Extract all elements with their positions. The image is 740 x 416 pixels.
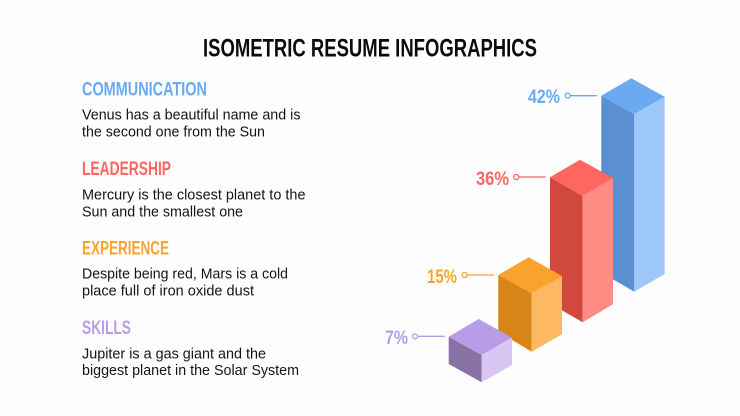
callout: 7% [385,327,445,349]
callout: 36% [476,168,546,190]
description: skills: Jupiter is a gas giant and the [82,345,266,362]
description: communication: the second one from the Sun [82,123,265,140]
heading: communication: COMMUNICATION [82,78,207,100]
description: skills: biggest planet in the Solar System [82,362,299,379]
callout: 42% [528,86,597,108]
callout: 7%: 7% [385,327,408,349]
callout: 15% [427,266,494,288]
text block: skills [82,317,299,379]
callout: 36%: 36% [476,168,509,190]
bar: purple 7% [449,319,512,382]
description: experience: Despite being red, Mars is a cold [82,266,288,283]
description: leadership: Mercury is the closest planet to the [82,186,306,203]
callout: 42%: 42% [528,86,560,108]
description: communication: Venus has a beautiful name and is [82,106,300,123]
callout: 15%: 15% [427,266,457,288]
text block: experience [82,238,288,300]
heading: leadership: LEADERSHIP [82,158,171,180]
text block: leadership [82,158,306,220]
description: leadership: Sun and the smallest one [82,203,243,220]
chart: isometric bars [449,78,665,382]
bar: blue 42% [601,78,665,292]
bar: red 36% [550,160,613,322]
heading: experience: EXPERIENCE [82,238,169,260]
description: experience: place full of iron oxide dust [82,283,255,300]
text block: communication [82,78,300,140]
bar: orange 15% [498,257,562,352]
heading: skills: SKILLS [82,317,131,339]
title: ISOMETRIC RESUME INFOGRAPHICS [203,34,537,62]
